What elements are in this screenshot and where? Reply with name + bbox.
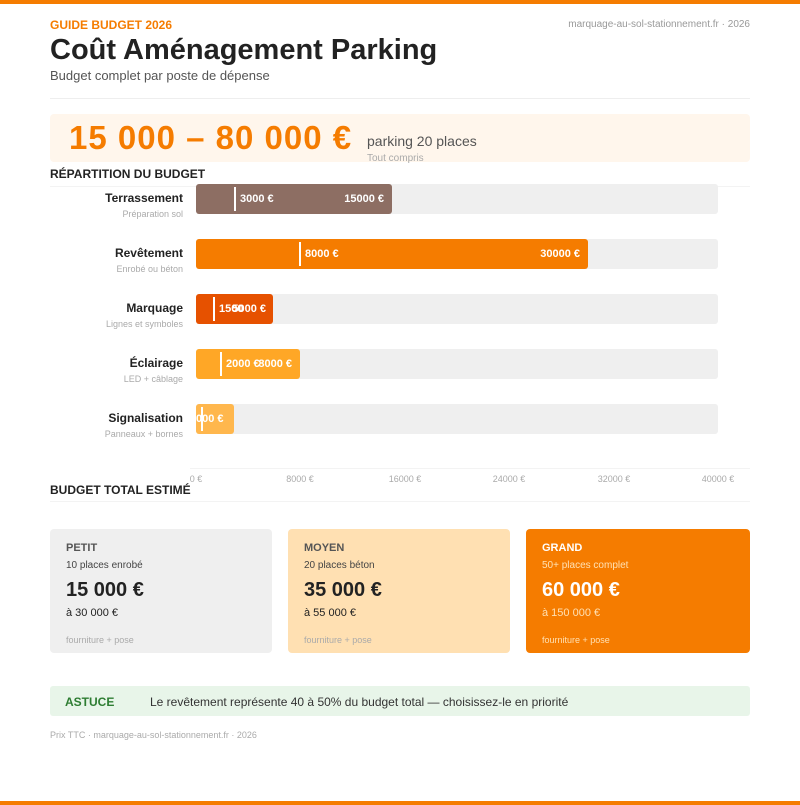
row: eclairage: 8000 € [258, 358, 292, 370]
card: petit [50, 529, 272, 653]
row: terrassement: 15000 € [344, 193, 384, 205]
hero range panel [50, 114, 750, 162]
title: Coût Aménagement Parking [50, 34, 437, 66]
card: grand: GRAND [542, 542, 582, 554]
card: petit: à 30 000 € [66, 607, 118, 619]
row: marquage: Lignes et symboles [106, 319, 183, 329]
row: revetement: Enrobé ou béton [116, 264, 183, 274]
x axis labels: 24000 € [493, 474, 525, 484]
bar chart [105, 184, 718, 439]
card: petit: PETIT [66, 542, 97, 554]
x axis labels [190, 474, 734, 484]
subtitle: Budget complet par poste de dépense [50, 68, 270, 83]
header label: GUIDE BUDGET 2026 [50, 18, 172, 32]
row: revetement [115, 239, 588, 274]
hero range panel: parking 20 places [367, 133, 477, 149]
x axis labels: 16000 € [389, 474, 421, 484]
card: grand: fourniture + pose [542, 635, 610, 645]
card: grand: 60 000 € [542, 579, 620, 601]
row: signalisation [105, 404, 234, 439]
card: petit: fourniture + pose [66, 635, 134, 645]
footer: Prix TTC · marquage-au-sol-stationnement.fr · 2026 [50, 730, 257, 740]
row: signalisation: Panneaux + bornes [105, 429, 183, 439]
x axis labels: 8000 € [286, 474, 314, 484]
card: moyen: à 55 000 € [304, 607, 356, 619]
source top right: marquage-au-sol-stationnement.fr · 2026 [568, 19, 750, 30]
card: grand: 50+ places complet [542, 560, 628, 571]
hero range panel: Tout compris [367, 153, 424, 164]
card: grand [526, 529, 750, 653]
row: signalisation: Signalisation [108, 411, 183, 425]
row: marquage: Marquage [126, 301, 183, 315]
x axis labels: 0 € [190, 474, 202, 484]
card: moyen [288, 529, 510, 653]
tip callout: Le revêtement représente 40 à 50% du budget total — choisissez-le en priorité [150, 695, 568, 709]
x axis labels: 40000 € [702, 474, 734, 484]
row: eclairage: LED + câblage [124, 374, 183, 384]
section heading: repartition: RÉPARTITION DU BUDGET [50, 167, 205, 181]
tip callout: ASTUCE [65, 695, 114, 709]
row: marquage [106, 294, 273, 329]
row: eclairage [124, 349, 300, 384]
card: moyen: 20 places béton [304, 560, 375, 571]
card: moyen: 35 000 € [304, 579, 382, 601]
card: petit: 15 000 € [66, 579, 144, 601]
row: eclairage: 2000 € [226, 358, 260, 370]
card: moyen: MOYEN [304, 542, 344, 554]
x axis labels: 32000 € [598, 474, 630, 484]
row: revetement: Revêtement [115, 246, 183, 260]
row: terrassement: Préparation sol [122, 209, 183, 219]
row: terrassement: 3000 € [240, 193, 274, 205]
row: terrassement [105, 184, 392, 219]
hero range panel: 15 000 – 80 000 € [69, 119, 352, 156]
card: moyen: fourniture + pose [304, 635, 372, 645]
card: grand: à 150 000 € [542, 607, 600, 619]
section heading: budget total: BUDGET TOTAL ESTIMÉ [50, 483, 191, 497]
tip callout [50, 686, 750, 716]
row: revetement: 8000 € [305, 248, 339, 260]
row: eclairage: Éclairage [130, 356, 183, 370]
row: signalisation: 000 € [196, 413, 224, 425]
row: terrassement: Terrassement [105, 191, 183, 205]
row: marquage: 1500 [219, 303, 243, 315]
row: marquage: 5000 € [232, 303, 266, 315]
card: petit: 10 places enrobé [66, 560, 143, 571]
row: revetement: 30000 € [540, 248, 580, 260]
